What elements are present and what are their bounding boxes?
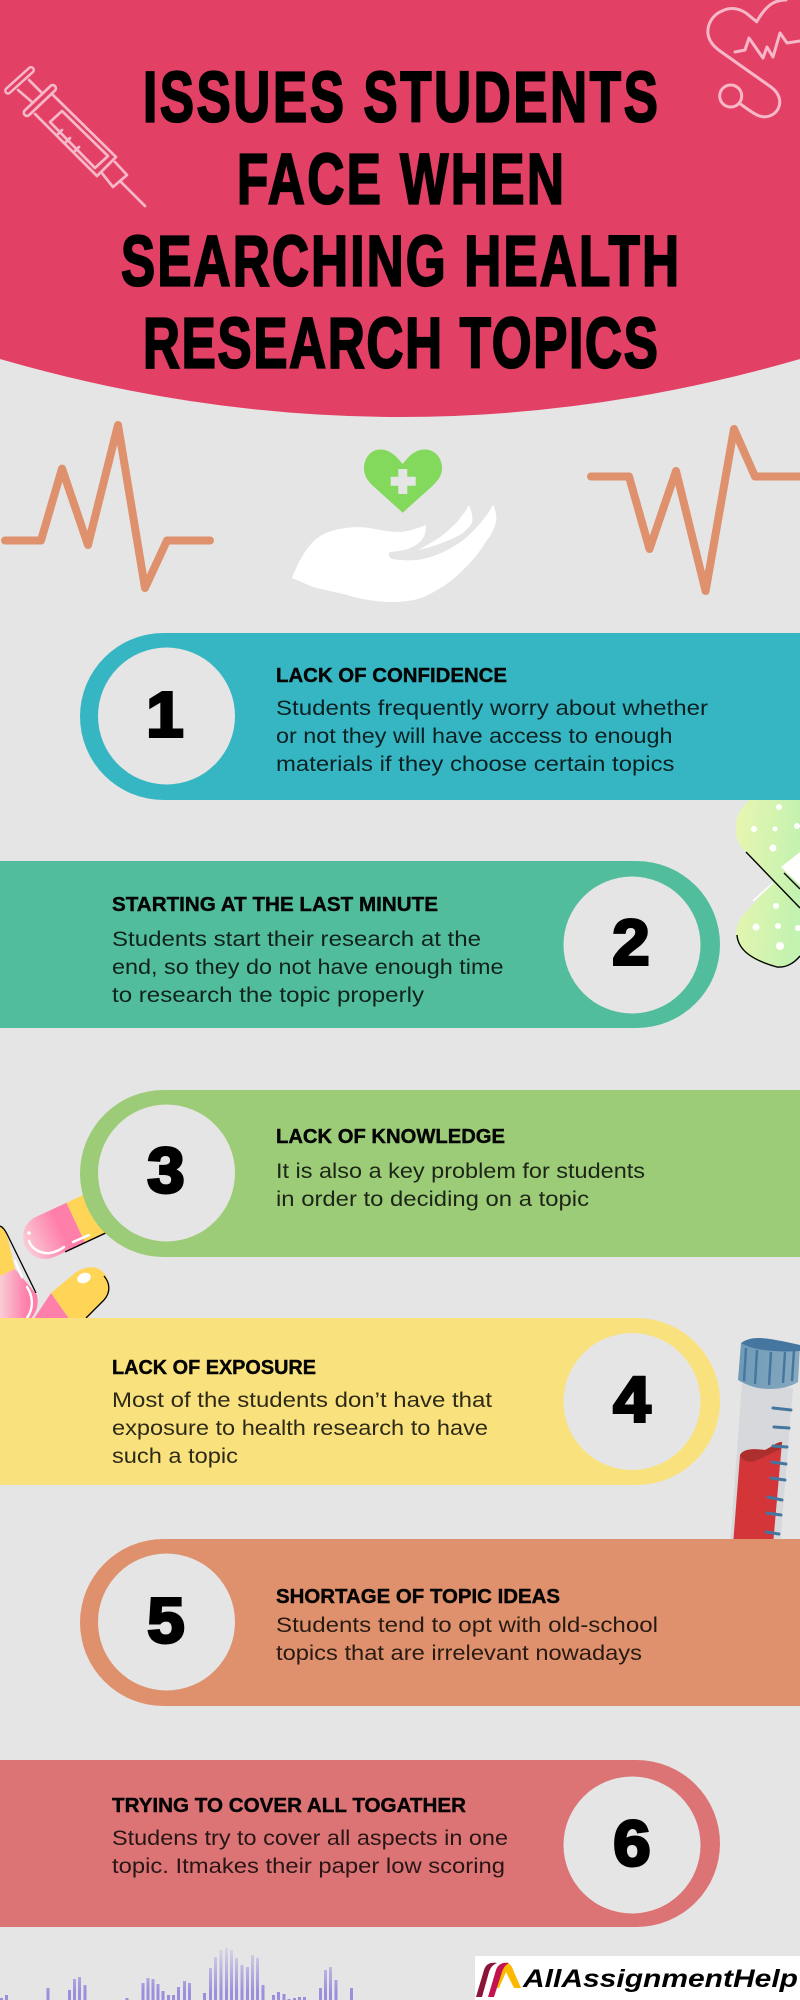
heading: trying to cover all togather: TRYING TO COVER ALL TOGATHER <box>112 1795 467 1817</box>
body text: to research the topic properly <box>112 984 425 1007</box>
number 3: 3 <box>147 1135 185 1206</box>
title: RESEARCH TOPICS <box>143 304 658 384</box>
body text: topics that are irrelevant nowadays <box>276 1642 642 1665</box>
icon: blood test tube <box>730 1338 800 1545</box>
body text: end, so they do not have enough time <box>112 956 504 979</box>
icon: green heart with cross <box>364 450 442 513</box>
body text: such a topic <box>112 1445 238 1468</box>
body text <box>276 1614 658 1665</box>
panel: issue 4 lack of exposure <box>0 1318 720 1485</box>
logo wordmark: AllAssignmentHelp <box>522 1965 798 1993</box>
panel: issue 2 starting at the last minute <box>0 861 720 1028</box>
number 2: 2 <box>612 907 650 978</box>
number 1: 1 <box>146 679 184 750</box>
heading: lack of confidence: LACK OF CONFIDENCE <box>276 665 507 687</box>
icon: heart stethoscope <box>708 0 800 117</box>
body text: in order to deciding on a topic <box>276 1188 589 1211</box>
logo mark <box>476 1963 521 1997</box>
body text <box>276 697 708 776</box>
title: SEARCHING HEALTH <box>121 222 679 302</box>
title <box>121 58 679 384</box>
panel: issue 3 lack of knowledge <box>80 1090 800 1257</box>
icon: open hand <box>292 505 496 602</box>
body text: It is also a key problem for students <box>276 1160 645 1183</box>
icon: heartbeat line left <box>5 425 210 588</box>
body text <box>112 928 504 1007</box>
sound wave decoration <box>0 1948 353 2000</box>
body text: materials if they choose certain topics <box>276 753 674 776</box>
title: ISSUES STUDENTS <box>143 58 658 138</box>
logo: AllAssignmentHelp <box>475 1956 800 2000</box>
body text: Most of the students don’t have that <box>112 1389 492 1412</box>
panel: issue 1 lack of confidence <box>80 633 800 800</box>
body text <box>276 1160 645 1211</box>
body text: or not they will have access to enough <box>276 725 672 748</box>
body text: Students frequently worry about whether <box>276 697 708 720</box>
heading: lack of knowledge: LACK OF KNOWLEDGE <box>276 1126 505 1148</box>
icon: bandage <box>736 798 800 967</box>
body text: topic. Itmakes their paper low scoring <box>112 1855 505 1878</box>
heading: starting at the last minute: STARTING AT THE LAST MINUTE <box>112 894 438 916</box>
number 5: 5 <box>147 1585 185 1656</box>
number 6: 6 <box>613 1808 651 1879</box>
title: FACE WHEN <box>237 140 564 220</box>
icon: capsule pills <box>0 1171 154 1320</box>
body text: Students tend to opt with old-school <box>276 1614 658 1637</box>
heading: shortage of topic ideas: SHORTAGE OF TOPIC IDEAS <box>276 1586 560 1608</box>
body text: Students start their research at the <box>112 928 481 951</box>
panel: issue 6 trying to cover all togather <box>0 1760 720 1927</box>
header banner <box>0 0 800 417</box>
body text: exposure to health research to have <box>112 1417 488 1440</box>
body text <box>112 1827 508 1878</box>
heading: lack of exposure: LACK OF EXPOSURE <box>112 1357 316 1379</box>
icon: heartbeat line right <box>591 429 800 591</box>
body text <box>112 1389 492 1468</box>
panel: issue 5 shortage of topic ideas <box>80 1539 800 1706</box>
body text: Studens try to cover all aspects in one <box>112 1827 508 1850</box>
icon: syringe <box>8 70 145 206</box>
number 4: 4 <box>613 1364 651 1435</box>
